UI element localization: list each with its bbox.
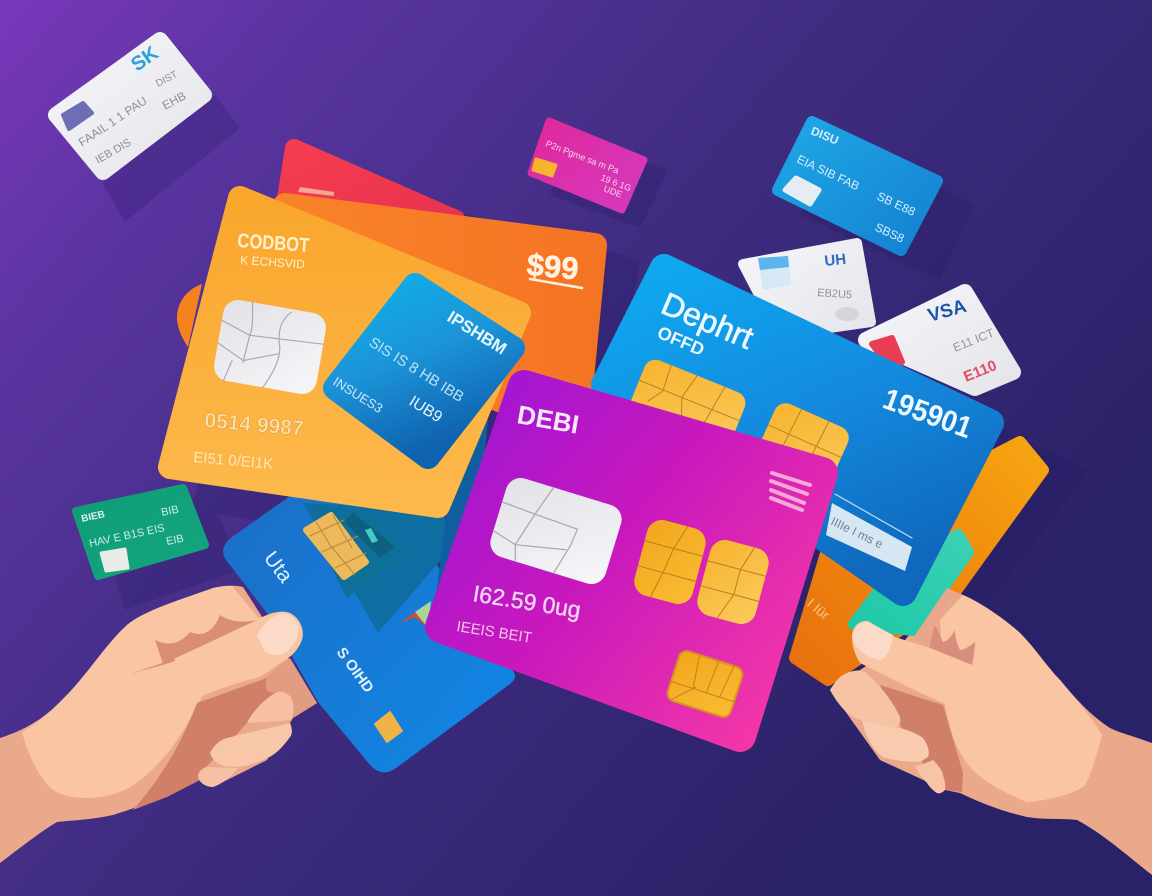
logo: SK	[127, 42, 163, 76]
card label: Uta	[259, 547, 297, 587]
card text: BIB	[160, 504, 180, 519]
red text: E110	[961, 357, 999, 386]
white chip	[487, 474, 625, 588]
chip small	[375, 712, 402, 742]
card: white behind blue	[743, 243, 871, 335]
signature strip	[826, 503, 912, 571]
hand base tone	[830, 588, 1152, 875]
card name: Dephrt	[656, 285, 759, 356]
blue square	[758, 256, 789, 270]
gold chip small	[666, 649, 744, 719]
palm shadow	[133, 678, 277, 810]
card: orange left tab	[177, 284, 202, 347]
finger shadow	[930, 625, 1000, 677]
top shade	[913, 588, 963, 647]
card: green	[76, 488, 205, 576]
card name: CODBOT	[237, 230, 310, 257]
card text: INSUES3	[330, 374, 386, 416]
under finger shadow	[880, 685, 963, 792]
colored fragments	[400, 602, 430, 627]
card text	[88, 504, 185, 550]
finger upper	[247, 692, 293, 723]
card label: BIEB	[80, 509, 106, 525]
card: magenta	[441, 386, 822, 736]
card holder: EI51 0/EI1K	[193, 449, 274, 473]
card: orange right	[795, 442, 1043, 680]
chip	[63, 103, 92, 129]
card text: EB2U5	[817, 287, 852, 301]
card text: SBS8	[873, 220, 907, 246]
finger shadow	[155, 615, 257, 664]
card subtitle: OFFD	[654, 322, 707, 360]
label: IPSHBM	[444, 307, 510, 358]
card: red back	[283, 148, 456, 219]
thumb	[133, 612, 303, 722]
chip	[212, 298, 328, 396]
card: white top left	[56, 40, 204, 172]
card text: E11 ICT	[951, 325, 997, 355]
logo: VSA	[926, 296, 969, 327]
card shadows	[100, 95, 1090, 720]
card: teal	[854, 535, 968, 630]
dark strip	[347, 515, 392, 555]
left hand thumb and fingers	[133, 612, 317, 810]
card subtitle: K ECHSVID	[240, 253, 306, 272]
card text: EIA SIB FAB	[795, 152, 862, 193]
red mark	[872, 338, 902, 368]
finger upper	[830, 671, 900, 727]
chip left	[625, 356, 749, 456]
finger middle	[210, 723, 292, 767]
card text	[76, 69, 188, 167]
finger lower	[198, 767, 238, 787]
pale tick	[298, 187, 334, 196]
card number: I62.59 0ug	[471, 580, 583, 623]
thumb nail	[257, 614, 299, 655]
teal mark	[365, 528, 378, 543]
card text	[795, 124, 918, 246]
card text: HAV E B1S EIS	[88, 522, 166, 550]
thumb nail	[852, 622, 893, 660]
card number: SIS IS 8 HB IBB	[366, 334, 467, 406]
card text: DISU	[809, 124, 841, 148]
card text	[544, 139, 633, 200]
card: yellow	[170, 198, 519, 506]
medium skin behind fingers	[262, 658, 317, 718]
right hand palm	[830, 588, 1152, 875]
hologram	[835, 307, 859, 321]
card text: 19 6 1G	[599, 173, 633, 193]
amount: $99	[525, 247, 580, 286]
left hand palm	[0, 586, 317, 863]
underline	[530, 279, 582, 288]
card holder: IEEIS BEIT	[455, 618, 533, 647]
card text: S OIHD	[333, 644, 377, 696]
gold chip right	[694, 537, 772, 627]
card text: EHB	[160, 89, 188, 113]
finger lower	[915, 760, 945, 793]
card text: P2n Pgme sa m Pa	[544, 139, 620, 176]
card: blue large	[605, 268, 990, 592]
card: white VISA	[866, 292, 1013, 388]
dark panel	[303, 503, 445, 633]
card text: IEB DIS	[94, 137, 133, 167]
card text: FAAIL 1 1 PAU	[76, 93, 149, 149]
card text: EIB	[165, 533, 185, 548]
chip	[785, 178, 819, 204]
strip line	[835, 494, 912, 538]
card: blue top right	[778, 122, 937, 250]
strip text: IIIIe I ms e	[829, 514, 885, 551]
chip	[101, 549, 128, 571]
card code: IUB9	[406, 393, 445, 426]
card: blue bottom left	[223, 450, 515, 772]
card: small pink	[531, 121, 644, 210]
chip	[306, 515, 366, 577]
green fragment	[415, 601, 431, 628]
inner panel	[310, 507, 407, 598]
amount: 195901	[879, 383, 976, 445]
card name: DEBI	[515, 399, 581, 440]
logo: UH	[824, 251, 847, 270]
card panel	[758, 256, 791, 290]
card text: UDE	[602, 184, 624, 200]
card number: 0514 9987	[204, 409, 304, 441]
dark card behind yellow	[435, 378, 492, 605]
contactless mark	[771, 473, 810, 510]
gold chip left	[631, 517, 709, 607]
finger middle	[862, 720, 929, 762]
card: orange large	[240, 205, 595, 430]
thumb	[852, 621, 1002, 732]
lit palm	[22, 586, 262, 798]
lit palm	[940, 595, 1102, 802]
card text: SB E88	[875, 189, 918, 219]
hand base tone	[0, 586, 317, 863]
chip	[533, 159, 556, 176]
chip right	[745, 399, 853, 509]
card: blue mini on yellow	[330, 285, 513, 457]
embossed text: I Iür	[804, 595, 833, 623]
right hand thumb and fingers	[830, 588, 1002, 793]
thumb crease	[133, 660, 175, 674]
card text: DIST	[154, 69, 180, 90]
